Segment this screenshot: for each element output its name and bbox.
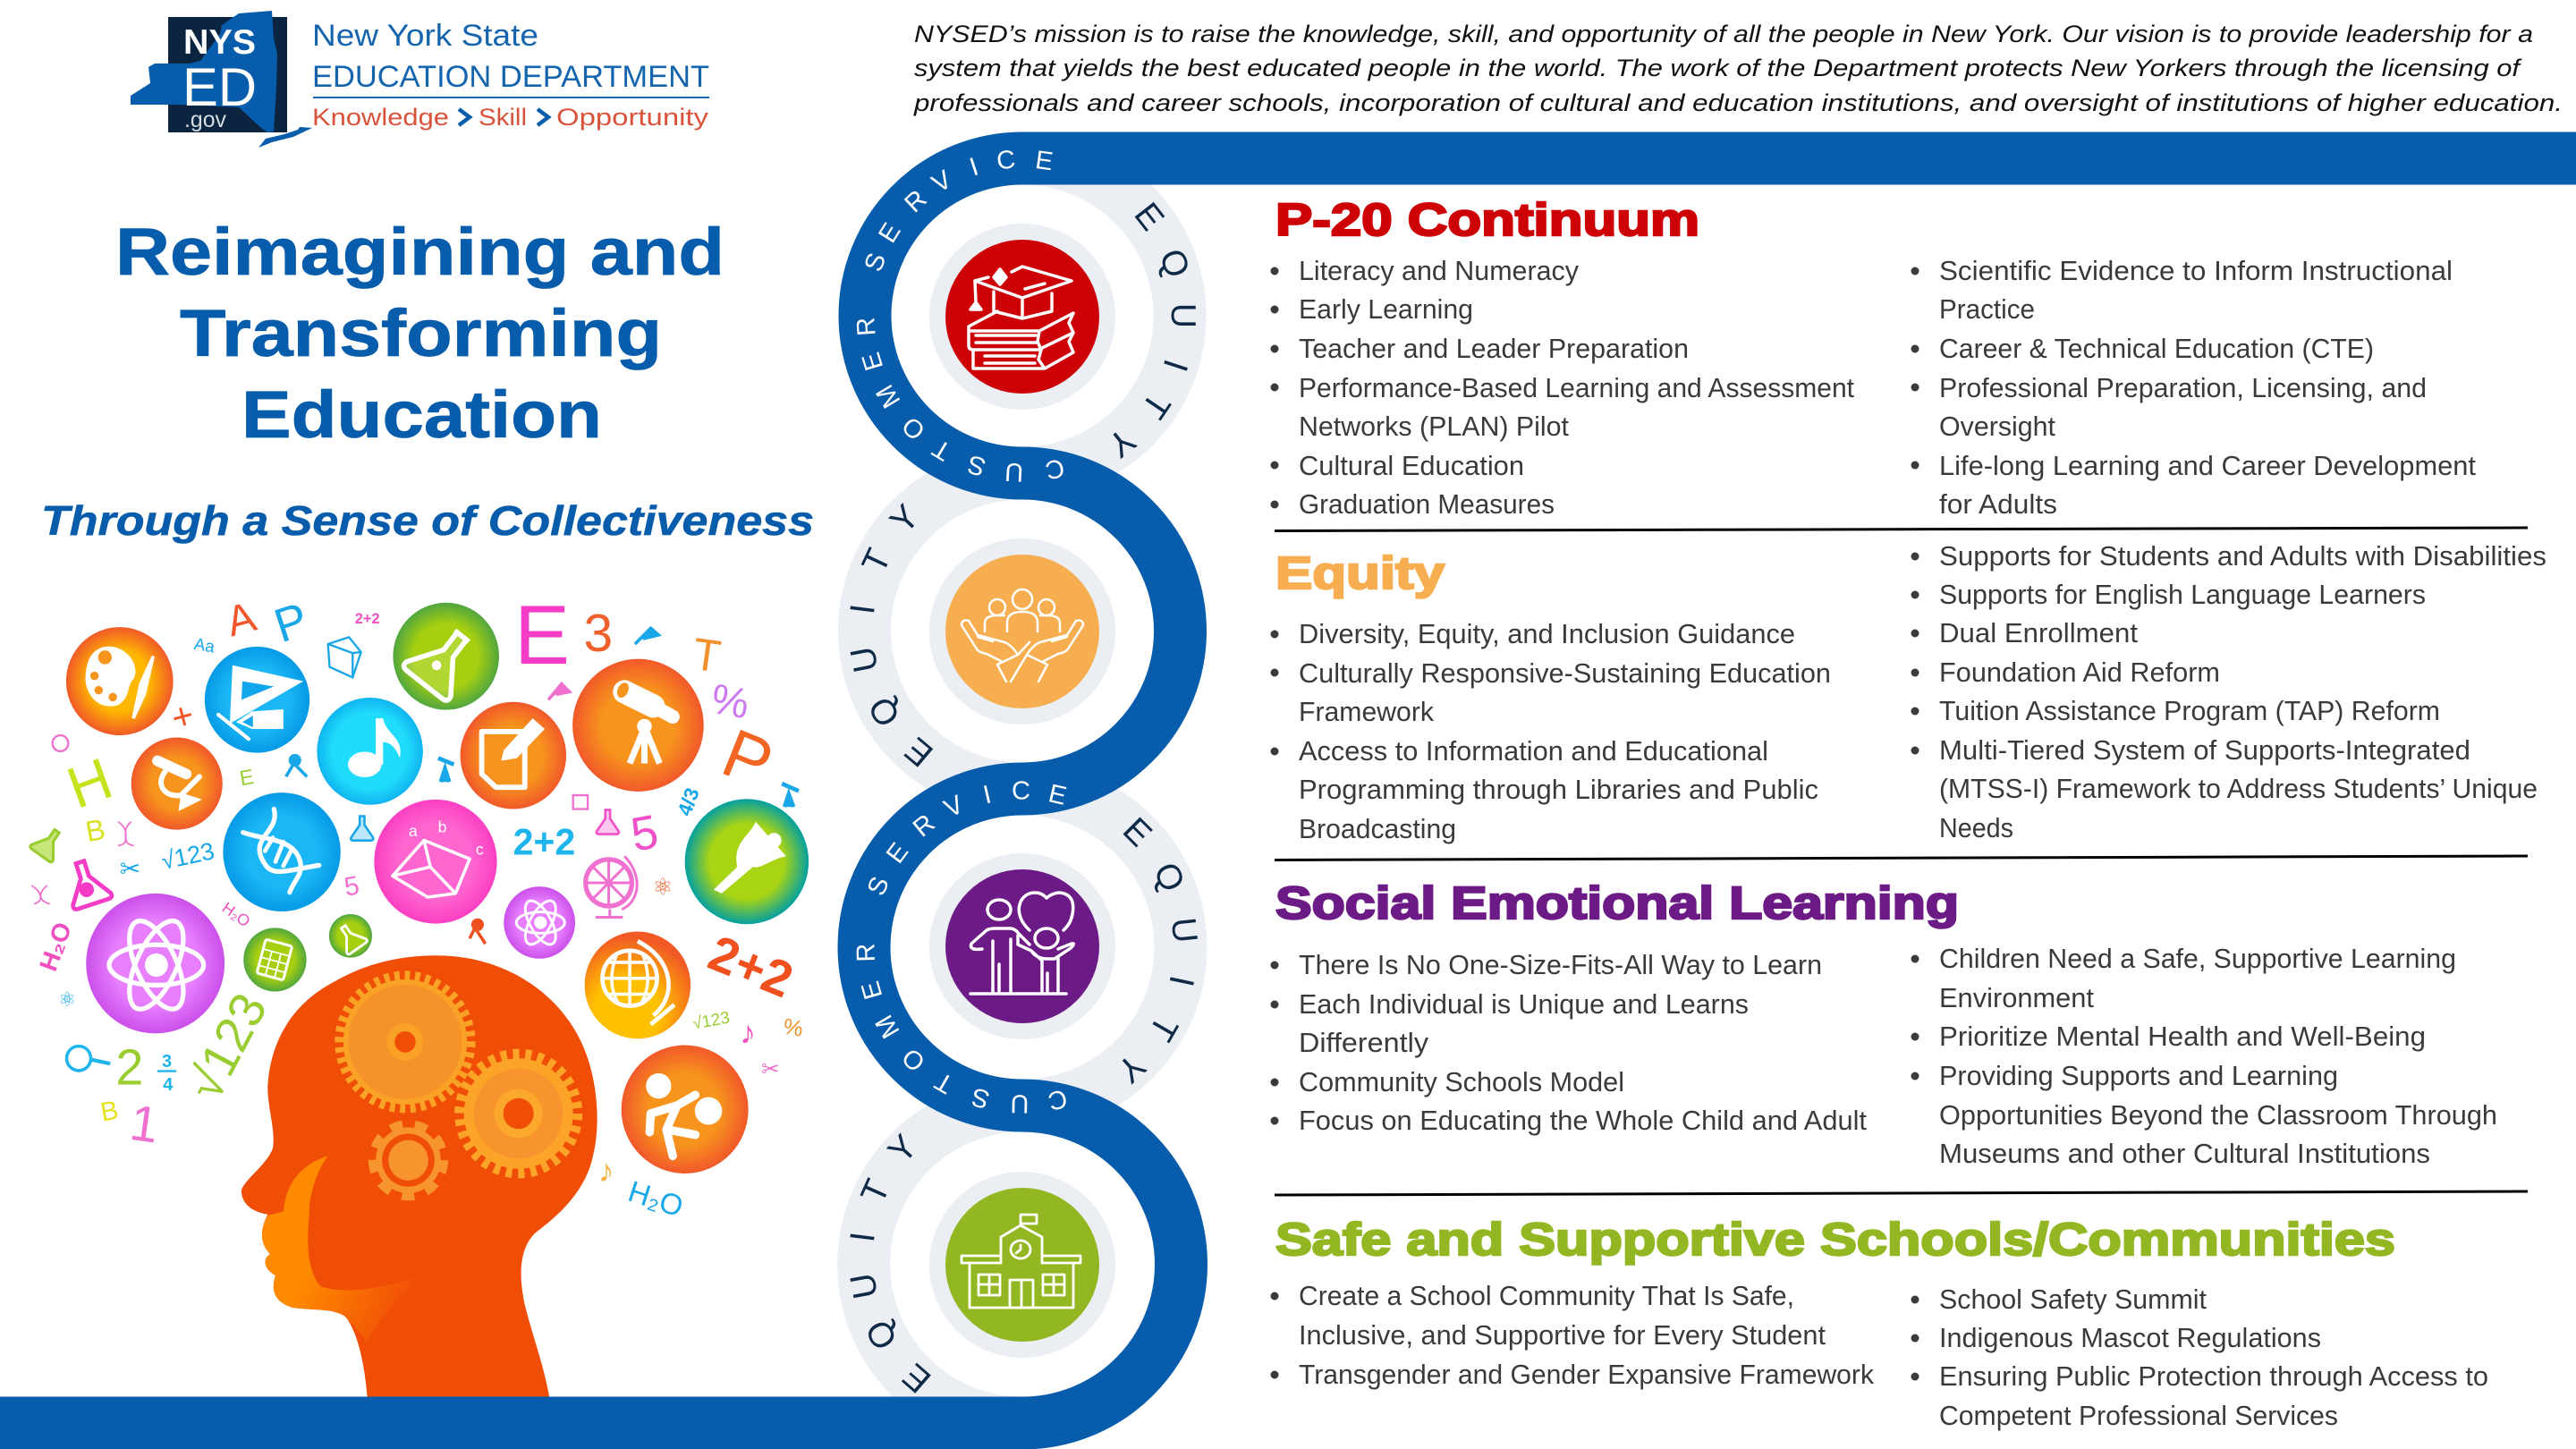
title: Education [242,377,602,452]
scattered letters and numbers: ✂ [761,1055,780,1081]
list: SEL right column: Providing Supports and Learning [1939,1060,2338,1091]
scattered letters and numbers [33,589,805,1224]
scattered letters and numbers: H₂O [219,899,253,930]
icon disc: calculator [243,928,307,992]
ring text: customer service, circle 1: S [964,449,989,481]
ring text: customer service, circle 3: O [897,1042,931,1077]
ring text: customer service, circle 1: E [857,349,889,374]
ring text: equity, circle 2: I [843,602,883,616]
icon disc: cube: b [438,818,447,836]
list: SEL left column: Community Schools Model [1299,1066,1624,1097]
ring text: customer service, circle 1: S [860,250,892,275]
panel: Equity [1270,540,2546,844]
list: Equity right column: Needs [1939,812,2013,843]
icon disc: microscope [131,737,223,830]
ring text: equity, circle 1: T [1133,386,1177,425]
scattered letters and numbers: 5 [627,805,662,862]
scattered letters and numbers: √123 [691,1008,731,1033]
ring text: equity, circle 2 [843,497,940,774]
list: SEL right column [1911,943,2497,1169]
icon disc: telescope [572,659,704,792]
ring text: customer service, circle 3: S [969,1081,993,1114]
ring text: equity, circle 2: U [843,643,886,675]
list: Equity left column: Framework [1299,696,1434,727]
list: Equity right column: Multi-Tiered System of Supports-Integrated [1939,734,2470,766]
scattered letters and numbers: P [268,593,314,653]
ring text: equity, circle 3 [1109,810,1204,1090]
list: P-20 right column: Scientific Evidence to Inform Instructional [1939,255,2453,286]
list: P-20 left column [1270,255,1854,520]
list: Equity right column: Supports for English Language Learners [1939,579,2426,610]
ring text: equity, circle 1: U [1164,303,1202,328]
list: SEL right column: Environment [1939,982,2094,1013]
ring text: equity, circle 4: U [843,1270,886,1301]
list: Safe schools left column: Transgender and Gender Expansive Framework [1299,1359,1874,1390]
ring text: customer service, circle 1: O [897,411,931,445]
ring text: customer service, circle 1: R [852,317,882,337]
ring text: equity, circle 4: Y [881,1128,925,1171]
panel: Social Emotional Learning [1270,877,2497,1169]
list: P-20 right column [1911,255,2476,520]
subtitle: Through a Sense of Collectiveness [41,497,814,544]
ring text: customer service, circle 3: U [1010,1089,1030,1118]
ring text: equity, circle 3: E [1115,810,1159,854]
list: Safe schools left column: Create a School Community That Is Safe, [1299,1280,1794,1311]
list: SEL left column: There Is No One-Size-Fits-All Way to Learn [1299,949,1822,980]
scattered letters and numbers: H [59,745,120,821]
ring text: customer service, circle 3: E [881,838,914,869]
icon: New York State silhouette [131,11,312,148]
ring text: equity, circle 4: T [854,1174,898,1209]
list: SEL right column: Museums and other Cultural Institutions [1939,1138,2430,1169]
list: P-20 right column: Practice [1939,293,2035,325]
grey equity rings [864,158,1181,1423]
ring text: customer service, circle 3: S [862,873,895,900]
ring text: equity, circle 1: Q [1151,244,1197,283]
logo wordmark: EDUCATION DEPARTMENT [312,60,709,94]
logo text: NYS ED .gov: .gov [184,107,226,132]
list: Equity right column: Foundation Aid Reform [1939,657,2220,688]
ring text: equity, circle 1: Y [1100,419,1142,464]
list: Equity left column: Programming through Libraries and Public [1299,774,1818,805]
list: Safe schools right column: Ensuring Public Protection through Access to [1939,1360,2488,1392]
list: Equity right column: Supports for Students and Adults with Disabilities [1939,540,2546,572]
icon disc: flask [393,603,499,710]
ring text: equity, circle 3: U [1164,916,1204,945]
scattered letters and numbers: A [222,593,261,646]
list: P-20 left column: Cultural Education [1299,450,1524,481]
list: SEL right column: Children Need a Safe, Supportive Learning [1939,943,2456,974]
scattered letters and numbers: + [167,693,199,739]
ring text: equity, circle 2: T [855,543,899,579]
icon disc: DNA [223,792,341,911]
scattered letters and numbers: 2+2 [701,924,801,1008]
list: P-20 right column: for Adults [1939,488,2057,520]
scattered letters and numbers: ⚛ [58,988,76,1012]
list: Equity left column: Access to Information and Educational [1299,735,1768,767]
scattered letters and numbers: 2+2 [513,821,575,863]
ring text: customer service, circle 1: C [996,145,1017,175]
ring text: customer service, circle 1: C [1043,453,1067,485]
ring text: customer service, circle 1: E [1033,146,1055,176]
scattered letters and numbers: B [83,813,107,848]
scattered letters and numbers: P [712,715,783,803]
ring text: equity, circle 1 [1100,196,1202,464]
scattered letters and numbers: 2+2 [355,611,380,627]
scattered letters and numbers: Aa [192,634,216,657]
logo wordmark [312,19,709,131]
icon disc: atom [86,894,225,1033]
icon disc: hand bell [685,799,809,924]
ring text: customer service, circle 1 [852,145,1067,487]
panel: Safe and Supportive Schools/Communities [1270,1214,2488,1431]
ring text: equity, circle 1: I [1156,355,1195,376]
ring text: equity, circle 3: Y [1109,1046,1153,1090]
scattered letters and numbers: 4/3 [674,784,704,819]
scattered letters and numbers: H₂O [33,919,77,975]
scattered letters and numbers: √123 [176,984,277,1109]
ring text: equity, circle 1: E [1126,196,1171,238]
scattered letters and numbers: % [708,675,752,728]
logo: NYSED [131,11,709,148]
logo wordmark: Opportunity [556,104,709,131]
list: P-20 left column: Early Learning [1299,293,1473,325]
ring text: customer service, circle 1: V [928,165,957,199]
logo wordmark: New York State [312,19,538,53]
logo text: NYS ED .gov: ED [182,57,257,117]
logo wordmark: Skill [479,104,527,131]
gear small [373,1124,444,1196]
title: Transforming [180,296,662,370]
ring text: customer service, circle 3: R [908,809,940,843]
heading: P-20 Continuum: P-20 Continuum [1275,194,1699,245]
small scattered icons [30,628,799,1071]
logo text: NYS ED .gov: NYS [183,23,256,62]
scattered letters and numbers: E [514,589,570,682]
scattered letters and numbers: 4 [163,1075,174,1095]
title: Reimagining and [115,215,724,289]
ring text: customer service, circle 3: T [930,1066,958,1098]
list: P-20 right column: Life-long Learning and Career Development [1939,450,2476,481]
icon disc: paper and pencil [461,702,566,809]
ring text: customer service, circle 3: C [1012,776,1030,806]
list: SEL left column: Focus on Educating the Whole Child and Adult [1299,1105,1867,1136]
scattered letters and numbers: ⚛ [652,874,674,902]
ring text: equity, circle 2: Y [883,497,927,541]
ring text: equity, circle 2: E [898,730,940,774]
icon: people in caring hands [929,538,1115,724]
icon disc: runner with ball [622,1045,749,1174]
scattered letters and numbers: 3 [584,603,613,663]
list: Equity left column [1270,618,1831,844]
ring text: equity, circle 3: Q [1146,857,1192,898]
ring text: equity, circle 4 [843,1128,938,1400]
ring text: customer service, circle 3: E [856,978,888,1003]
scattered letters and numbers: 2 [115,1038,143,1095]
ring text: equity, circle 3: I [1161,972,1201,990]
ring text: customer service, circle 3: R [852,943,881,962]
scattered letters and numbers: E [238,765,256,790]
heading: Safe and Supportive Schools/Communities: Safe and Supportive Schools/Communities [1275,1214,2395,1265]
scattered letters and numbers: ♪ [740,1016,756,1051]
ring text: customer service, circle 1: T [928,433,956,466]
icon disc: ruler and pencil [205,647,309,753]
scattered letters and numbers: ✂ [120,854,140,884]
scattered letters and numbers: T [690,629,724,682]
list: P-20 right column: Oversight [1939,411,2055,442]
list: P-20 left column: Teacher and Leader Preparation [1299,333,1689,364]
list: P-20 left column: Graduation Measures [1299,488,1555,520]
ring text: customer service, circle 1: U [1004,457,1024,487]
list: Equity left column: Broadcasting [1299,813,1456,844]
scattered letters and numbers: H₂O [624,1174,687,1224]
list: Safe schools right column: School Safety Summit [1939,1284,2207,1315]
list: Equity right column: (MTSS-I) Framework to Address Students’ Unique [1939,773,2538,804]
ring text: equity, circle 4: Q [859,1313,905,1356]
gear large [340,976,470,1108]
list: Equity left column: Diversity, Equity, and Inclusion Guidance [1299,618,1795,649]
mission statement: NYSED’s mission is to raise the knowledge, skill, and opportunity of all the people in New York. Our vision is to provide leadership for a [914,21,2533,47]
ring text: customer service, circle 3: E [1046,779,1069,811]
icon disc: music note [317,698,423,805]
ring text: customer service, circle 1: M [870,379,906,412]
list: Safe schools left column: Inclusive, and Supportive for Every Student [1299,1319,1826,1351]
scattered letters and numbers: 3 [162,1052,172,1072]
icon disc: globe [585,932,691,1038]
ring text: customer service, circle 3: V [940,790,969,824]
panel: P-20 Continuum [1270,194,2476,520]
icon: graduation cap on books [929,224,1115,410]
ring text: equity, circle 3: T [1141,1010,1185,1047]
icon: school building [929,1172,1115,1358]
heading: Equity: Equity [1275,547,1445,598]
face highlight [262,1156,436,1342]
icon disc: cube [374,800,497,924]
ring text: equity, circle 4: E [895,1356,938,1400]
illustration: head with education icons [30,589,809,1397]
icon disc: palette [66,627,174,735]
list: P-20 left column: Networks (PLAN) Pilot [1299,411,1569,442]
list: SEL left column: Each Individual is Unique and Learns [1299,988,1749,1020]
icon: adult and child with heart [929,853,1115,1039]
list: P-20 right column: Career & Technical Education (CTE) [1939,333,2374,364]
scattered letters and numbers: ♪ [598,1154,614,1189]
scattered letters and numbers: % [782,1014,805,1042]
ring text: customer service, circle 1: I [966,153,982,182]
ring text: customer service, circle 3: C [1045,1083,1070,1115]
ring text: customer service, circle 3: M [870,1010,906,1043]
list: Safe schools left column [1270,1280,1874,1390]
icon disc: cube: a [409,822,418,840]
list: SEL right column: Opportunities Beyond the Classroom Through [1939,1099,2497,1131]
mission statement [913,21,2563,116]
list: Equity right column: Tuition Assistance Program (TAP) Reform [1939,695,2440,726]
icon disc: small atom [504,886,575,959]
list: Safe schools right column: Competent Professional Services [1939,1400,2338,1431]
scattered letters and numbers: B [98,1095,121,1128]
list: SEL right column: Prioritize Mental Health and Well-Being [1939,1021,2426,1052]
list: Equity right column [1911,540,2546,843]
ring text: customer service, circle 1: R [899,185,933,218]
ring text: equity, circle 4: I [843,1230,883,1244]
heading: Social Emotional Learning: Social Emotional Learning [1275,877,1959,928]
title [115,215,724,452]
scattered letters and numbers: √123 [158,836,216,875]
logo mark background [168,17,287,132]
list: P-20 left column: Literacy and Numeracy [1299,255,1579,286]
mission statement: system that yields the best educated people in the world. The work of the Department protects New Yorkers through the licensing of [914,55,2522,81]
list: Safe schools right column: Indigenous Mascot Regulations [1939,1322,2321,1353]
icon disc: cube: c [476,840,484,859]
list: Equity right column: Dual Enrollment [1939,617,2138,648]
logo wordmark: Knowledge [312,104,449,131]
scattered letters and numbers: 5 [342,870,361,902]
ring text: customer service, circle 3: I [980,780,994,809]
ring text: equity, circle 2: Q [861,690,908,733]
list: Safe schools right column [1911,1284,2488,1431]
head silhouette [242,955,597,1397]
list: SEL left column: Differently [1299,1027,1429,1058]
list: Equity left column: Culturally Responsive-Sustaining Education [1299,657,1831,689]
icon disc: small flask [329,914,372,958]
ring text: customer service, circle 1: E [873,218,907,248]
list: P-20 left column: Performance-Based Learning and Assessment [1299,372,1854,403]
scattered letters and numbers: 1 [127,1094,162,1154]
gear medium [460,1055,577,1173]
list: SEL left column [1270,949,1867,1136]
ring text: customer service, circle 3 [852,776,1070,1118]
list: P-20 right column: Professional Preparation, Licensing, and [1939,372,2427,403]
logo text: NYS ED .gov [182,23,257,132]
mission statement: professionals and career schools, incorporation of cultural and education institutions, and oversight of institutions of higher education. [913,89,2563,116]
